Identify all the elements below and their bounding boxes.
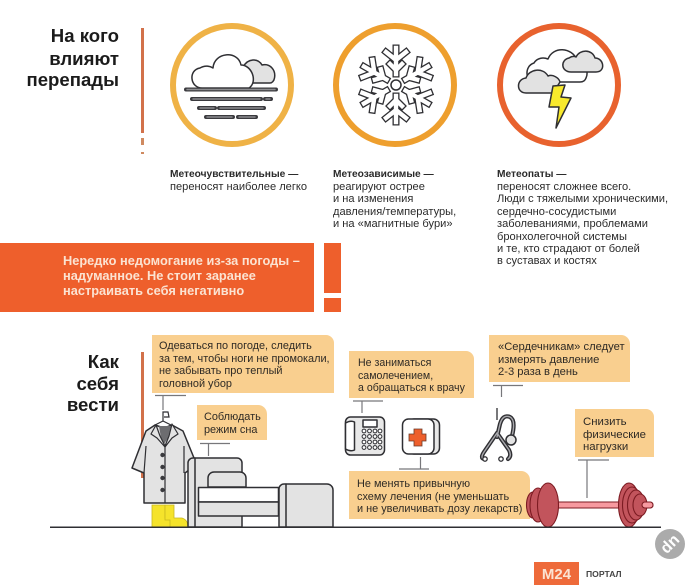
text: Метеопаты: Люди с тяжелыми хроническими, bbox=[497, 193, 668, 205]
banner: warning note: настраивать себя негативно bbox=[63, 283, 244, 298]
text: Метеопаты: заболеваниями, проблемами bbox=[497, 218, 648, 230]
bubble: сердечникам: 2-3 раза в день bbox=[498, 366, 578, 378]
bubble: одеваться по погоде: не забывать про теплый bbox=[159, 365, 283, 377]
bubble: схема лечения: Не менять привычную bbox=[357, 478, 470, 490]
text: Метеочувствительные: Метеочувствительные — bbox=[170, 169, 299, 180]
heading: Как себя вести: Как bbox=[88, 351, 120, 372]
bubble: режим сна: Соблюдать bbox=[204, 411, 261, 423]
bubble: одеваться по погоде: головной убор bbox=[159, 378, 232, 390]
icon: storm cloud circle bbox=[500, 26, 618, 144]
icon: yellow boots bbox=[152, 505, 188, 527]
bubble: сердечникам: измерять давление bbox=[498, 354, 599, 366]
banner: warning note: Нередко недомогание из-за погоды – bbox=[63, 253, 300, 268]
bubble: физические нагрузки: нагрузки bbox=[583, 441, 628, 453]
bubble: схема лечения bbox=[349, 471, 530, 519]
bubble: самолечение: а обращаться к врачу bbox=[358, 382, 466, 394]
logo: M24 портал bbox=[534, 562, 622, 585]
logo: M24 портал: ПОРТАЛ bbox=[586, 569, 622, 579]
icon: first aid kit bbox=[399, 419, 440, 469]
ground line bbox=[50, 526, 661, 528]
text: Метеопаты: бронхолегочной системы bbox=[497, 231, 627, 243]
exclamation line top bbox=[141, 28, 144, 154]
divider bar bbox=[141, 352, 144, 478]
icon: stethoscope bbox=[482, 386, 523, 461]
icon: coat on hanger bbox=[132, 396, 194, 503]
bubble: одеваться по погоде: за тем, чтобы ноги не промокали, bbox=[159, 353, 330, 365]
text: Метеопаты bbox=[497, 169, 668, 267]
bubble: схема лечения: и не увеличивать дозу лекарств) bbox=[357, 503, 522, 515]
bubble: физические нагрузки bbox=[575, 409, 654, 457]
text: Метеопаты: Метеопаты — bbox=[497, 169, 567, 180]
text: Метеозависимые: давления/температуры, bbox=[333, 206, 456, 218]
icon: telephone bbox=[346, 401, 384, 455]
banner: warning note bbox=[0, 243, 314, 312]
icon: bed bbox=[188, 444, 333, 527]
bubble: физические нагрузки: физические bbox=[583, 429, 646, 441]
bubble: сердечникам: «Сердечникам» следует bbox=[498, 341, 625, 353]
text: Метеопаты: переносят сложнее всего. bbox=[497, 181, 631, 193]
text: Метеопаты: и те, кто страдают от болей bbox=[497, 243, 640, 255]
icon: banner exclamation mark bbox=[324, 243, 341, 312]
icon: snowflake circle bbox=[336, 26, 454, 144]
bubble: схема лечения: схему лечения (не уменьшать bbox=[357, 491, 510, 503]
logo: M24 портал: M24 bbox=[542, 566, 572, 583]
heading: Как себя вести: себя bbox=[76, 373, 119, 394]
title: На кого влияют перепады bbox=[26, 25, 119, 90]
text: Метеочувствительные bbox=[170, 169, 307, 193]
heading: Как себя вести: вести bbox=[67, 394, 119, 415]
text: Метеопаты: в суставах и костях bbox=[497, 255, 597, 267]
heading: Как себя вести bbox=[67, 351, 120, 415]
bubble: режим сна: режим сна bbox=[204, 424, 258, 436]
banner: warning note: надуманное. Не стоит заранее bbox=[63, 268, 256, 283]
text: Метеозависимые: и на изменения bbox=[333, 193, 413, 205]
bubble: физические нагрузки: Снизить bbox=[583, 416, 627, 428]
text: Метеозависимые: и на «магнитные бури» bbox=[333, 218, 452, 230]
title: На кого влияют перепады: На кого bbox=[51, 25, 119, 46]
title: На кого влияют перепады: перепады bbox=[26, 69, 119, 90]
text: Метеозависимые: Метеозависимые — bbox=[333, 169, 435, 180]
bubble: сердечникам bbox=[489, 335, 630, 382]
icon: barbell bbox=[526, 460, 653, 527]
text: Метеопаты: сердечно-сосудистыми bbox=[497, 206, 616, 218]
bubble: самолечение: самолечением, bbox=[358, 370, 433, 382]
bubble: самолечение: Не заниматься bbox=[358, 357, 431, 369]
bubble: самолечение bbox=[349, 351, 474, 398]
text: Метеозависимые: реагируют острее bbox=[333, 181, 425, 193]
bubble: одеваться по погоде: Одеваться по погоде, следить bbox=[159, 340, 312, 352]
bubble: одеваться по погоде bbox=[152, 335, 334, 393]
text: Метеозависимые bbox=[333, 169, 456, 230]
watermark: dn: dn bbox=[657, 531, 683, 557]
bubble: режим сна bbox=[197, 405, 267, 440]
icon: fog cloud circle bbox=[173, 26, 291, 144]
title: На кого влияют перепады: влияют bbox=[49, 48, 119, 69]
text: Метеочувствительные: переносят наиболее легко bbox=[170, 181, 307, 193]
